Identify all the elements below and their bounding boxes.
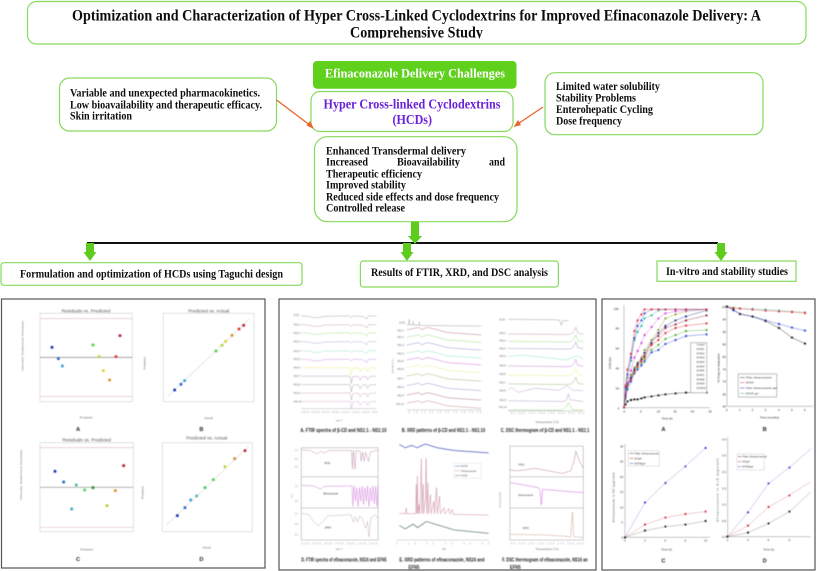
chart E: XRD comparison: EFN5 xyxy=(462,465,468,468)
panel: Hyper Cross-linked Cyclodextrins: Hyper Cross-linked Cyclodextrins xyxy=(324,98,501,113)
chart C: DSC thermograms: NS1:9 xyxy=(499,399,507,402)
chart B: XRD patterns: NS1:5 xyxy=(397,360,405,363)
chart D: FTIR comparison: 1.0 xyxy=(295,449,299,452)
chart A: FTIR spectra: cm⁻¹ xyxy=(336,419,343,423)
plot letters: D xyxy=(199,557,203,563)
chart D: retention in E+D: 1.5 xyxy=(722,486,726,490)
chart E: XRD comparison: 0 10 20 30 40 50 xyxy=(396,542,490,545)
chart A: FTIR spectra: β-CD xyxy=(294,314,299,317)
chart A: drug release curves: 20 xyxy=(691,409,694,413)
chart A: residuals vs predicted: Predicted xyxy=(80,416,93,420)
chart C: DSC thermograms: NS1:3 xyxy=(499,347,507,350)
chart C: retention in SC: Efinaconazole in SC (µg/cm2) xyxy=(612,472,616,522)
panel: formulation challenges: Stability Problems xyxy=(556,92,636,104)
chart C: DSC thermograms: NS1:2 xyxy=(499,340,507,343)
chart B: predicted vs actual: Predicted vs. Actual xyxy=(188,308,229,313)
chart A: drug release curves: 10 xyxy=(657,409,660,413)
panel: benefits: Controlled release xyxy=(326,203,405,215)
chart D: retention in E+D: 3.0 xyxy=(722,437,726,441)
chart D: FTIR comparison: 0.6 xyxy=(295,500,299,503)
chart B: XRD patterns: NS1:6 xyxy=(397,368,405,371)
chart A: residuals vs predicted: Internally Studentized Residuals xyxy=(21,320,25,371)
plot letters: A xyxy=(76,427,80,433)
chart B: stability curves: 0 xyxy=(726,408,728,412)
chart D: retention in E+D: 6 xyxy=(768,538,770,542)
panel: pharmacokinetic challenges: Skin irritation xyxy=(70,110,133,122)
chart F: DSC comparison: Efinaconazole xyxy=(518,494,534,497)
chart D: predicted vs actual xyxy=(141,435,252,549)
chart D: retention in E+D: EFN5gel xyxy=(742,465,754,469)
chart A: drug release curves: EFN01 xyxy=(697,348,705,351)
chart D: FTIR comparison: 0.6 xyxy=(295,534,299,537)
chart A: FTIR spectra: NS1:6 xyxy=(294,367,301,370)
chart D: retention in E+D xyxy=(716,437,811,551)
chart C: retention in SC: 6 xyxy=(664,539,666,543)
chart D: retention in E+D: Efinaconazole in E+D (µg/cm2) xyxy=(716,458,720,522)
chart B: XRD patterns: NS1:4 xyxy=(397,352,405,355)
chart D: predicted vs actual: Predicted xyxy=(141,486,145,499)
caption F: F. DSC thermogram of efinaconazole, NS16 an xyxy=(502,557,588,563)
chart C: DSC thermograms: NS1:10 xyxy=(499,406,507,409)
panel: formulation challenges: Dose frequency xyxy=(556,116,622,128)
arrow: left box to HCDs xyxy=(277,100,314,129)
chart C: residuals vs predicted: Predicted xyxy=(80,547,93,551)
chart D: retention in E+D: 2.5 xyxy=(722,454,726,458)
chart B: stability curves: 65 xyxy=(723,392,726,396)
heading: formulation and optimization: Formulation and optimization of HCDs using Taguchi design xyxy=(20,267,283,281)
chart A: drug release curves: 15 xyxy=(673,409,677,413)
chart D: retention in E+D: 3 xyxy=(747,538,749,542)
chart C: retention in SC: EFN5gel xyxy=(634,461,646,465)
heading: in-vitro and stability: In-vitro and stability studies xyxy=(666,264,788,278)
title text: Optimization and Characterization of Hyper Cross-Linked Cyclodextrins for Improved Efinaconazole Delivery: A xyxy=(72,8,762,25)
chart C: retention in SC: 30 xyxy=(620,444,624,448)
chart B: stability curves: 60 xyxy=(723,405,726,409)
chart B: stability curves: 1 xyxy=(739,408,741,412)
chart C: retention in SC: 5 xyxy=(621,520,623,524)
chart C: retention in SC: 3 xyxy=(644,539,646,543)
chart B: stability curves xyxy=(716,305,813,419)
panel: benefits: and xyxy=(489,157,506,169)
chart C: residuals vs predicted xyxy=(19,437,133,551)
chart A: drug release curves: 80 xyxy=(616,327,619,331)
chart A: FTIR spectra: NS1:8 xyxy=(294,384,301,387)
chart D: FTIR comparison: 1.0 xyxy=(295,513,299,516)
chart D: retention in E+D: 0.0 xyxy=(722,535,726,539)
chart A: residuals vs predicted xyxy=(21,308,132,420)
arrow: down to results xyxy=(400,243,414,261)
chart D: retention in E+D: 0.5 xyxy=(722,519,726,523)
chart B: XRD patterns xyxy=(391,319,482,414)
chart B: stability curves: 100 xyxy=(722,305,727,309)
title text: Comprehensive Study xyxy=(350,24,483,42)
chart A: FTIR spectra: NS1:10 xyxy=(294,400,302,403)
caption E: EFN5 xyxy=(409,565,420,571)
chart A: drug release curves: 0 xyxy=(623,409,625,413)
chart letters: B xyxy=(763,427,767,433)
chart A: drug release curves xyxy=(608,305,712,421)
chart B: XRD patterns: NS1:8 xyxy=(397,386,405,389)
panel: release and stability plots xyxy=(602,299,815,570)
chart A: FTIR spectra: NS1:1 xyxy=(294,323,301,326)
chart C: retention in SC: Time (h) xyxy=(661,547,672,551)
chart D: retention in E+D: Time (h) xyxy=(763,547,774,551)
chart A: drug release curves: 20 xyxy=(616,386,619,390)
chart B: predicted vs actual: Predicted xyxy=(143,357,147,370)
chart C: DSC thermograms: NS1:4 xyxy=(499,355,507,358)
chart A: drug release curves: EFN07 xyxy=(697,374,705,377)
chart C: residuals vs predicted: Internally Studentized Residuals xyxy=(19,449,23,500)
chart C: DSC thermograms: NS1:6 xyxy=(499,373,507,376)
chart C: retention in SC: 15 xyxy=(620,490,624,494)
chart B: predicted vs actual: Actual xyxy=(204,416,213,420)
chart A: drug release curves: 5 xyxy=(640,409,642,413)
caption F xyxy=(502,557,588,571)
chart C: retention in SC: 0 xyxy=(624,539,626,543)
caption F: EFN5 xyxy=(510,565,521,571)
panel: FTIR, XRD and DSC plots xyxy=(279,299,596,571)
chart D: retention in E+D: EFgel xyxy=(742,460,750,464)
chart B: stability curves: 70 xyxy=(723,380,726,384)
chart A: drug release curves: EFN06 xyxy=(697,370,705,373)
chart D: FTIR comparison: 1.0 xyxy=(295,485,299,488)
chart F: DSC comparison: Temperature (°C) xyxy=(535,547,559,551)
chart letters: D xyxy=(763,558,767,564)
chart F: DSC comparison: NS16 xyxy=(518,463,525,466)
chart D: retention in E+D: 2.0 xyxy=(722,470,726,474)
chart A: FTIR spectra: NS1:5 xyxy=(294,358,301,361)
chart C: DSC thermograms: NS1:8 xyxy=(499,390,507,393)
title box xyxy=(28,2,806,44)
panel: pharmacokinetic challenges xyxy=(60,78,276,131)
chart letters: C xyxy=(661,558,665,564)
chart C: retention in SC: EFgel xyxy=(634,456,642,460)
chart A: FTIR spectra: NS1:4 xyxy=(294,350,301,353)
chart D: FTIR comparison: % T xyxy=(291,493,294,498)
panel: benefits xyxy=(314,137,517,222)
chart A: FTIR spectra: NS1:9 xyxy=(294,392,301,395)
chart letters xyxy=(661,427,767,564)
chart A: drug release curves: EFN08 xyxy=(697,378,705,381)
chart C: retention in SC: 20 xyxy=(620,475,624,479)
chart A: drug release curves: EFN04 xyxy=(697,361,705,364)
chart A: FTIR spectra xyxy=(294,314,378,423)
chart B: XRD patterns: Intensity (a.u.) xyxy=(391,358,394,373)
chart A: drug release curves: 25 xyxy=(708,409,712,413)
chart A: FTIR spectra: NS1:3 xyxy=(294,341,301,344)
chart B: stability curves: 80 xyxy=(723,355,726,359)
chart D: FTIR comparison: 0.8 xyxy=(295,458,299,461)
chart A: drug release curves: EFN05 xyxy=(697,365,705,368)
chart C: residuals vs predicted: Residuals vs. Predicted xyxy=(62,437,111,442)
chart B: XRD patterns: β-CD xyxy=(399,321,405,324)
panel: pharmacokinetic challenges: Variable and unexpected pharmacokinetics. xyxy=(70,88,260,100)
chart D: FTIR comparison: 0.6 xyxy=(295,465,299,468)
chart B: XRD patterns: NS1:10 xyxy=(396,403,405,406)
caption C: C. DSC thermogram of β-CD and NS1:1 - NS1:1 xyxy=(501,428,590,434)
arrow: down from benefits xyxy=(408,222,422,244)
chart B: stability curves: Time (months) xyxy=(760,415,779,419)
chart C: DSC thermograms: 50 100 150 200 250 300 350 400 xyxy=(511,412,585,415)
chart B: stability curves: 85 xyxy=(723,342,726,346)
chart B: XRD patterns: NS1:9 xyxy=(397,395,405,398)
caption D: D. FTIR spectra of efinaconazole, NS16 and EFN5 xyxy=(301,557,387,563)
chart D: FTIR comparison: 0.8 xyxy=(295,523,299,526)
chart B: predicted vs actual xyxy=(143,308,254,420)
chart C: retention in SC: Plain efinaconazole xyxy=(634,451,659,455)
chart C: DSC thermograms xyxy=(499,318,585,424)
heading: in-vitro and stability xyxy=(657,261,796,281)
chart E: XRD comparison: NS16 xyxy=(462,475,468,478)
title text xyxy=(72,10,761,38)
chart C: retention in SC: 0 xyxy=(621,536,623,540)
panel: benefits: Enhanced Transdermal delivery xyxy=(326,145,466,157)
panel: Hyper Cross-linked Cyclodextrins: (HCDs) xyxy=(392,113,432,128)
chart F: DSC comparison: Heat flow (mW) xyxy=(499,491,502,508)
chart D: retention in E+D: 0 xyxy=(727,538,729,542)
chart D: predicted vs actual: Actual xyxy=(202,545,211,549)
chart D: predicted vs actual: Predicted vs. Actual xyxy=(186,435,227,440)
chart C: retention in SC xyxy=(612,444,710,551)
chart A: drug release curves: CDR (%) xyxy=(608,357,612,369)
caption E xyxy=(399,557,485,571)
caption A: A. FTIR spectra of β-CD and NS1:1 - NS1:10 xyxy=(300,428,387,434)
panel: formulation challenges: Enterohepatic Cycling xyxy=(556,104,653,116)
chart C: DSC thermograms: β-CD xyxy=(499,318,505,321)
arrow: down to in-vitro xyxy=(714,243,728,261)
chart B: XRD patterns: NS1:7 xyxy=(397,377,405,380)
chart B: XRD patterns: NS1:2 xyxy=(397,336,405,339)
panel: benefits: Improved stability xyxy=(326,180,406,192)
chart D: retention in E+D: 1.0 xyxy=(722,503,726,507)
chart B: stability curves: 3 xyxy=(765,408,767,412)
chart E: XRD comparison: 2θ xyxy=(442,547,446,551)
chart C: DSC thermograms: NS1:1 xyxy=(499,332,507,335)
chart B: stability curves: % Drug not degraded xyxy=(716,354,720,382)
chart C: retention in SC: 9 xyxy=(684,539,686,543)
chart F: DSC comparison: 50 100 150 200 250 300 350 400 xyxy=(511,542,584,545)
panel: formulation challenges: Limited water solubility xyxy=(556,81,660,93)
plot letters: B xyxy=(199,427,203,433)
chart A: drug release curves: Control xyxy=(697,344,705,347)
chart D: retention in E+D: 9 xyxy=(788,538,790,542)
heading: Efinaconazole Delivery Challenges xyxy=(313,61,516,89)
chart B: stability curves: 2 xyxy=(752,408,754,412)
chart D: FTIR comparison: cm⁻¹ xyxy=(336,547,343,551)
chart B: stability curves: 6 xyxy=(804,408,806,412)
chart B: stability curves: EFN5 gel xyxy=(746,391,759,395)
chart B: stability curves: EFN5 xyxy=(746,381,754,385)
chart A: drug release curves: 60 xyxy=(616,347,619,351)
plot letters xyxy=(76,427,203,563)
chart F: DSC comparison xyxy=(499,446,584,551)
chart A: FTIR spectra: 4000 3500 3000 2500 2000 1500 1000 500 xyxy=(301,411,378,414)
chart B: XRD patterns: NS1:1 xyxy=(397,330,405,333)
chart C: retention in SC: 10 xyxy=(620,505,624,509)
arrow: down to formulation xyxy=(84,243,96,261)
chart letters: A xyxy=(661,427,665,433)
chart A: FTIR spectra: NS1:7 xyxy=(294,375,301,378)
panel: benefits: Bioavailability xyxy=(397,157,460,169)
chart B: stability curves: Plain efinaconazole xyxy=(746,376,772,380)
chart C: retention in SC: 12 xyxy=(704,539,708,543)
chart A: drug release curves: EFN03 xyxy=(697,357,705,360)
chart E: XRD comparison xyxy=(396,444,490,551)
chart B: stability curves: Plain efinaconazole gel xyxy=(746,386,777,390)
chart A: drug release curves: EFN02 xyxy=(697,352,705,355)
chart A: drug release curves: 40 xyxy=(616,367,619,371)
chart A: drug release curves: 0 xyxy=(618,406,620,410)
chart C: DSC thermograms: NS1:5 xyxy=(499,365,507,368)
chart B: XRD patterns: NS1:3 xyxy=(397,344,405,347)
plot letters: C xyxy=(76,557,80,563)
panel: benefits: Increased xyxy=(326,157,369,169)
chart B: stability curves: 90 xyxy=(723,330,726,334)
panel: benefits: Reduced side effects and dose frequency xyxy=(326,191,499,203)
caption B: B. XRD patterns of β-CD and NS1:1 - NS1:10 xyxy=(402,428,485,434)
chart D: FTIR comparison: NS16 xyxy=(324,462,331,465)
chart B: stability curves: 4 xyxy=(778,408,780,412)
chart F: DSC comparison: EFN5 xyxy=(523,527,529,530)
chart D: FTIR comparison: Efinaconazole xyxy=(323,492,339,495)
chart C: retention in SC: 25 xyxy=(620,460,624,464)
panel: Taguchi diagnostic plots xyxy=(2,299,265,568)
chart D: FTIR comparison xyxy=(291,448,378,551)
chart D: FTIR comparison: 4000 3500 3000 2500 2000 1500 1000 xyxy=(301,542,378,545)
chart C: DSC thermograms: NS1:7 xyxy=(499,382,507,385)
heading: Efinaconazole Delivery Challenges: Efinaconazole Delivery Challenges xyxy=(325,66,505,80)
panel: benefits: Therapeutic efficiency xyxy=(326,168,422,180)
chart D: FTIR comparison: EFN5 xyxy=(325,527,332,530)
chart B: stability curves: 75 xyxy=(723,367,726,371)
chart B: stability curves: 5 xyxy=(791,408,793,412)
panel: formulation challenges xyxy=(545,73,763,135)
chart B: XRD patterns: 5 10 15 20 25 30 35 40 45 50 xyxy=(409,411,482,414)
chart C: DSC thermograms: Temperature (°C) xyxy=(535,420,559,424)
heading: results of analysis xyxy=(360,261,558,287)
chart A: residuals vs predicted: Residuals vs. Predicted xyxy=(62,308,111,313)
chart E: XRD comparison: Efinaconazole xyxy=(462,470,477,473)
chart A: drug release curves: 100 xyxy=(614,307,619,311)
heading: formulation and optimization xyxy=(1,263,302,285)
connector line xyxy=(87,242,718,244)
caption E: E. XRD patterns of efinaconazole, NS16 and xyxy=(399,557,485,563)
panel: pharmacokinetic challenges: Low bioavailability and therapeutic efficacy. xyxy=(70,99,262,111)
chart B: stability curves: 95 xyxy=(723,317,726,321)
chart A: drug release curves: EFN010 xyxy=(697,387,706,390)
heading: results of analysis: Results of FTIR, XRD, and DSC analysis xyxy=(371,265,548,279)
chart A: drug release curves: Time (h) xyxy=(662,417,673,421)
panel: Hyper Cross-linked Cyclodextrins xyxy=(311,92,513,132)
chart D: retention in E+D: Plain efinaconazole xyxy=(742,455,767,459)
chart A: FTIR spectra: NS1:2 xyxy=(294,332,301,335)
arrow: right box to HCDs xyxy=(514,107,543,127)
chart A: drug release curves: EFN09 xyxy=(697,383,705,386)
